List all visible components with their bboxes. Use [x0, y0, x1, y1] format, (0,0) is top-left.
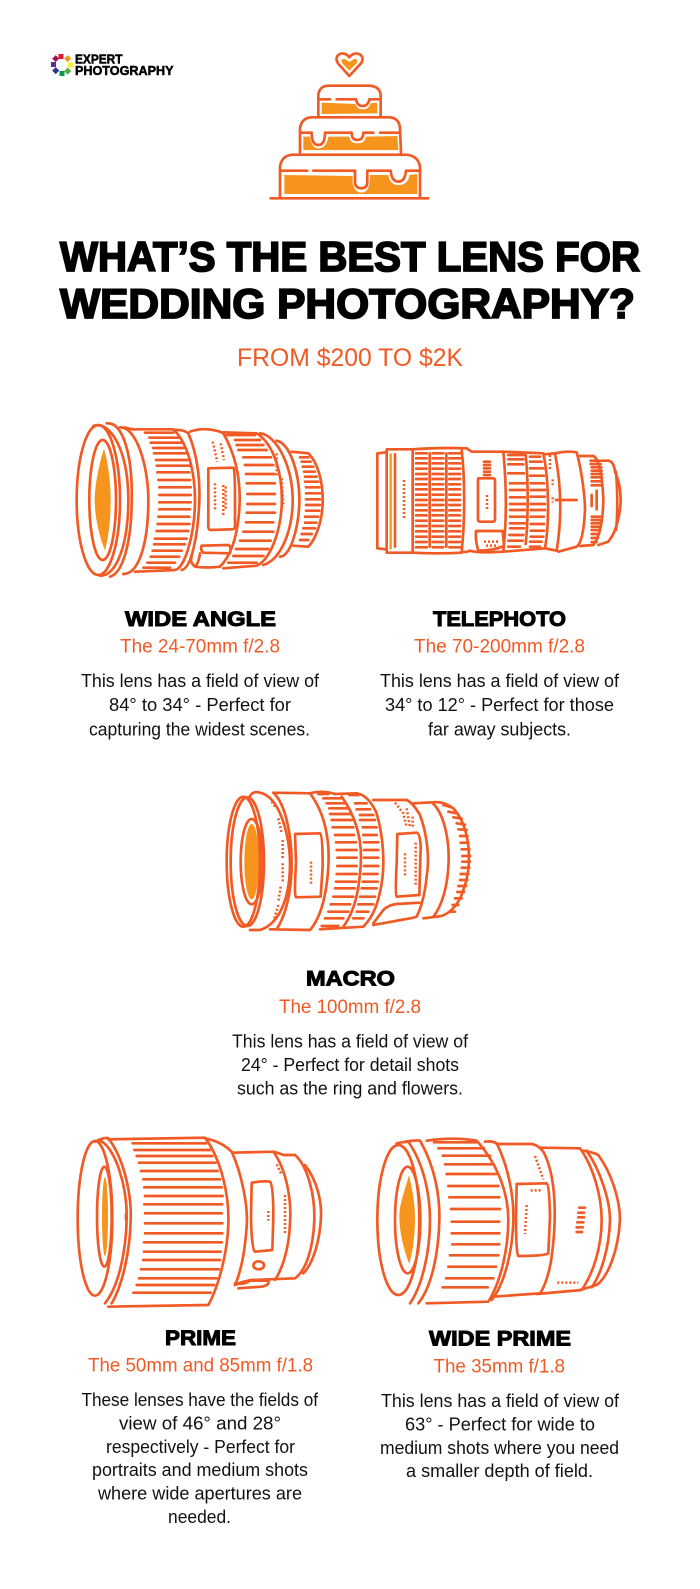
panel: telephoto lens [377, 448, 621, 740]
subheading: macro model: The 100mm f/2.8 [279, 997, 421, 1018]
text: macro description: such as the ring and flowers. [237, 1078, 463, 1098]
subtitle: FROM $200 TO $2K [237, 344, 463, 372]
text: prime description: These lenses have the fields of [82, 1389, 319, 1410]
panel: prime lens [78, 1138, 321, 1527]
text: wide angle description: 84° to 34° - Perfect for [109, 694, 291, 715]
text: macro description [232, 1030, 469, 1098]
text: wide prime description: 63° - Perfect for wide to [405, 1414, 595, 1434]
heading: prime: PRIME [165, 1327, 236, 1350]
subheading: telephoto model: The 70-200mm f/2.8 [414, 636, 585, 658]
logo: Expert Photography: PHOTOGRAPHY [75, 64, 174, 78]
text: wide prime description: medium shots where you need [380, 1437, 619, 1458]
text: prime description: view of 46° and 28° [119, 1412, 281, 1434]
panel: wide prime lens [377, 1139, 620, 1481]
text: wide prime description: a smaller depth of field. [406, 1460, 593, 1481]
heading: wide prime: WIDE PRIME [429, 1328, 571, 1350]
icon: prime lens illustration [78, 1138, 321, 1307]
text: wide angle description: capturing the widest scenes. [89, 718, 310, 740]
subheading: prime model: The 50mm and 85mm f/1.8 [88, 1356, 313, 1376]
panel: macro lens [227, 792, 470, 1098]
heading: macro: MACRO [306, 968, 395, 990]
text: wide prime description [380, 1390, 620, 1481]
text: wide prime description: This lens has a field of view of [381, 1390, 620, 1411]
text: macro description: This lens has a field of view of [232, 1030, 469, 1052]
title [60, 233, 640, 327]
text: prime description: needed. [168, 1506, 231, 1527]
icon: wedding cake with heart [271, 53, 428, 198]
subheading: wide prime model: The 35mm f/1.8 [434, 1356, 565, 1378]
panel: wide angle lens [77, 423, 323, 740]
text: prime description: portraits and medium shots [92, 1459, 308, 1480]
heading: telephoto: TELEPHOTO [433, 608, 566, 631]
subheading: wide angle model: The 24-70mm f/2.8 [120, 636, 280, 658]
logo: Expert Photography: EXPERT [75, 52, 123, 66]
icon: wide prime lens illustration [377, 1139, 620, 1303]
text: wide angle description [81, 670, 320, 740]
text: telephoto description: 34° to 12° - Perfect for those [385, 694, 614, 715]
text: wide angle description: This lens has a field of view of [81, 670, 320, 691]
icon: macro lens illustration [227, 792, 470, 930]
text: telephoto description [380, 670, 620, 740]
icon: telephoto lens illustration [377, 448, 621, 553]
text: macro description: 24° - Perfect for detail shots [241, 1054, 459, 1075]
text: prime description: where wide apertures are [97, 1482, 302, 1504]
heading: wide angle: WIDE ANGLE [125, 608, 276, 631]
icon: wide angle lens illustration [77, 423, 323, 577]
text: telephoto description: This lens has a field of view of [380, 670, 620, 691]
text: prime description: respectively - Perfect for [106, 1436, 295, 1457]
text: prime description [82, 1389, 319, 1527]
title: WEDDING PHOTOGRAPHY? [60, 280, 635, 327]
logo: Expert Photography [51, 52, 174, 78]
title: WHAT’S THE BEST LENS FOR [60, 233, 640, 280]
text: telephoto description: far away subjects. [428, 718, 571, 740]
